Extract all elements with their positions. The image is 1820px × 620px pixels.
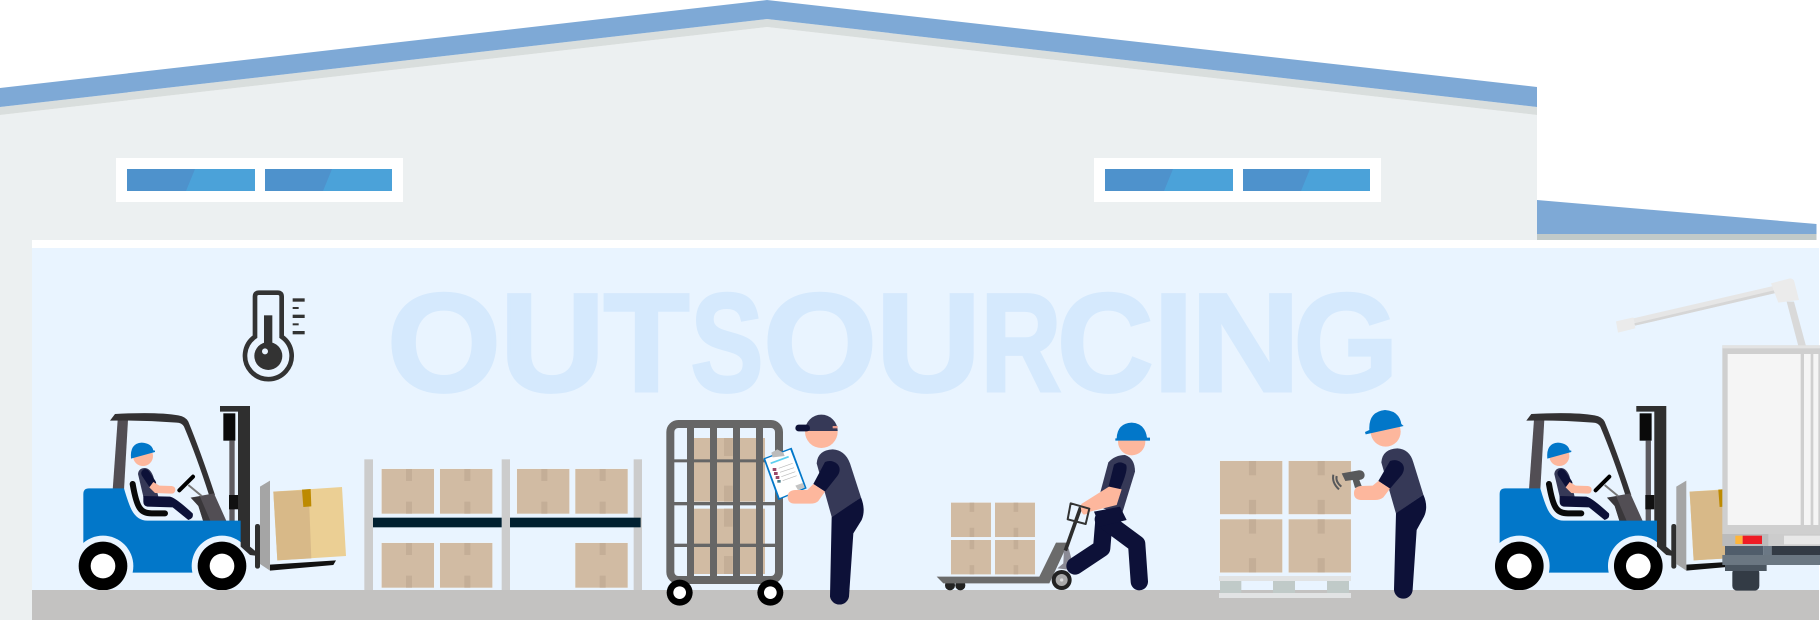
window right xyxy=(1094,158,1381,202)
roll cage with boxes xyxy=(667,424,783,606)
floor xyxy=(32,590,1819,620)
title: OUTSOURCING: O xyxy=(387,264,501,421)
title: OUTSOURCING: I xyxy=(1153,264,1194,421)
forklift right xyxy=(1489,406,1762,596)
left wall strip xyxy=(0,115,32,620)
worker with scanner xyxy=(1333,410,1426,599)
worker pulling pallet truck xyxy=(1068,423,1150,582)
title: OUTSOURCING: O xyxy=(763,264,877,421)
clipboard xyxy=(763,448,807,500)
truck loading arm xyxy=(1616,278,1806,346)
title: OUTSOURCING: U xyxy=(500,264,605,421)
pallet with boxes xyxy=(1219,460,1352,598)
interior opening xyxy=(32,240,1820,590)
side roof xyxy=(1537,200,1816,240)
forklift left xyxy=(73,406,346,596)
icon: thermometer xyxy=(245,293,305,379)
title: OUTSOURCING: G xyxy=(1294,264,1398,421)
title: OUTSOURCING: T xyxy=(604,264,690,421)
icon: barcode scanner xyxy=(1333,470,1365,489)
main roof xyxy=(0,0,1537,115)
title: OUTSOURCING: C xyxy=(1057,264,1154,421)
pallet truck with boxes xyxy=(937,502,1081,590)
title: OUTSOURCING: U xyxy=(876,264,981,421)
delivery truck rear xyxy=(1722,345,1820,591)
title: OUTSOURCING: S xyxy=(690,264,764,421)
title: OUTSOURCING: R xyxy=(980,264,1062,421)
window left xyxy=(116,158,403,202)
worker with clipboard xyxy=(763,415,864,605)
building wall xyxy=(0,27,1537,248)
title: OUTSOURCING: N xyxy=(1190,264,1300,421)
storage shelf with boxes xyxy=(364,459,642,590)
